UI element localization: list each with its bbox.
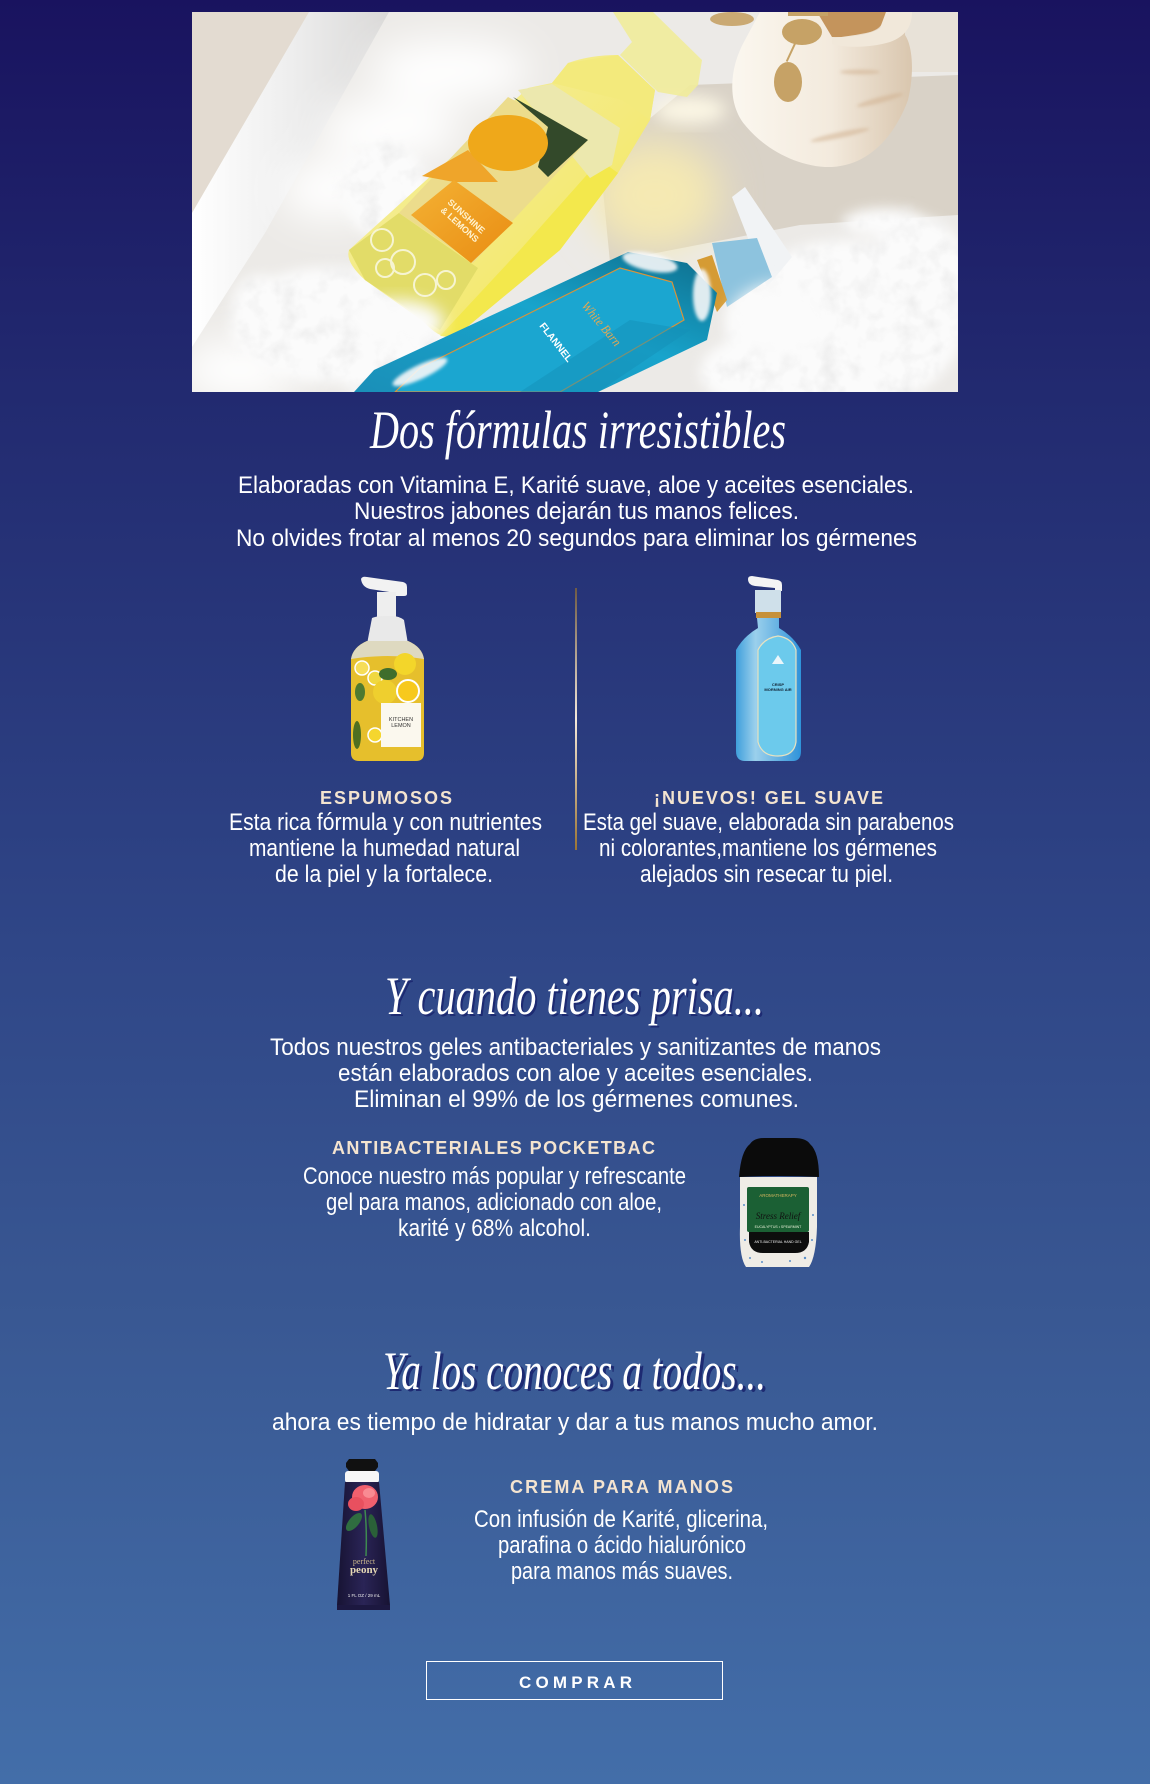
hydrate sentence: ahora es tiempo de hidratar y dar a tus manos mucho amor. (272, 1409, 878, 1436)
product: antibacteriales pocketbac: karité y 68% alcohol. (398, 1215, 591, 1242)
blue gel bottle: White Barn (579, 299, 624, 349)
product: espumosos: Esta rica fórmula y con nutrientes (229, 809, 542, 836)
vase (710, 12, 912, 167)
icon: foaming soap bottle (lemon) (351, 577, 424, 761)
intro text block: Nuestros jabones dejarán tus manos felices. (354, 498, 799, 525)
icon: foaming soap bottle (lemon): LEMON (391, 723, 411, 729)
icon: pocketbac sanitizer (739, 1138, 819, 1267)
icon: pocketbac sanitizer: EUCALYPTUS • SPEARMINT (755, 1225, 802, 1229)
yellow foaming bottle: SUNSHINE (446, 197, 487, 236)
yellow foaming bottle: & LEMONS (439, 205, 481, 244)
product: gel suave: ni colorantes,mantiene los gérmenes (599, 835, 937, 862)
intro text block: No olvides frotar al menos 20 segundos para eliminar los gérmenes (236, 525, 917, 552)
icon: hand cream tube: peony (350, 1564, 379, 1576)
icon: hand cream tube: perfect (353, 1557, 376, 1566)
intro text block: Elaboradas con Vitamina E, Karité suave, aloe y aceites esenciales. (238, 472, 914, 499)
icon: gel soap bottle (blue): MORNING AIR (764, 687, 792, 692)
yellow foaming bottle (348, 12, 702, 337)
icon: gel soap bottle (blue) (736, 576, 801, 761)
product: antibacteriales pocketbac (303, 1138, 686, 1242)
icon: foaming soap bottle (lemon): KITCHEN (389, 717, 413, 723)
heading: Ya los conoces a todos: Ya los conoces a todos... (383, 1341, 766, 1401)
product: crema para manos: parafina o ácido hialurónico (498, 1532, 746, 1559)
product: antibacteriales pocketbac: Conoce nuestro más popular y refrescante (303, 1163, 686, 1190)
product: crema para manos: Con infusión de Karité, glicerina, (474, 1506, 768, 1533)
product: antibacteriales pocketbac: gel para manos, adicionado con aloe, (326, 1189, 662, 1216)
product: gel suave (583, 788, 954, 888)
icon: pocketbac sanitizer: AROMATHERAPY (759, 1193, 797, 1198)
product: antibacteriales pocketbac: ANTIBACTERIALES POCKETBAC (332, 1138, 655, 1158)
product: crema para manos: CREMA PARA MANOS (510, 1477, 733, 1497)
divider line (575, 588, 577, 850)
heading: Y cuando tienes prisa: Y cuando tienes prisa... (387, 968, 766, 1028)
foam (230, 142, 968, 410)
button: comprar: COMPRAR (519, 1673, 632, 1692)
antibacterial text block: Eliminan el 99% de los gérmenes comunes. (354, 1086, 799, 1113)
warm shadow area (600, 75, 958, 262)
icon: pocketbac sanitizer: Stress Relief (756, 1211, 802, 1221)
product: gel suave: Esta gel suave, elaborada sin parabenos (583, 809, 954, 836)
antibacterial text block: Todos nuestros geles antibacteriales y sanitizantes de manos (270, 1034, 881, 1061)
icon: hand cream tube (337, 1459, 390, 1610)
hero photo: hand soaps in foam (180, 12, 968, 410)
intro text block (236, 472, 917, 552)
antibacterial text block (270, 1034, 881, 1113)
icon: hand cream tube: 1 FL OZ / 29 mL (348, 1593, 381, 1598)
icon: gel soap bottle (blue): CRISP (772, 682, 784, 687)
heading: Ya los conoces a todos: Ya los conoces a todos... (386, 1343, 769, 1403)
product: gel suave: alejados sin resecar tu piel. (640, 861, 893, 888)
blue gel bottle: FLANNEL (537, 321, 574, 365)
product: gel suave: ¡NUEVOS! GEL SUAVE (654, 788, 883, 808)
product: crema para manos (474, 1477, 768, 1585)
icon: pocketbac sanitizer: ANTI-BACTERIAL HAND GEL (754, 1240, 802, 1244)
product: espumosos (229, 788, 542, 888)
product: crema para manos: para manos más suaves. (511, 1558, 733, 1585)
button: comprar (426, 1662, 722, 1700)
foam over bottle base (380, 288, 454, 336)
product: espumosos: mantiene la humedad natural (249, 835, 520, 862)
heading: Dos fórmulas irresistibles: Dos fórmulas irresistibles (369, 400, 786, 460)
antibacterial text block: están elaborados con aloe y aceites esenciales. (338, 1060, 813, 1087)
blue gel bottle (354, 187, 792, 392)
product: espumosos: de la piel y la fortalece. (275, 861, 493, 888)
heading: Y cuando tienes prisa: Y cuando tienes prisa... (385, 966, 764, 1026)
product: espumosos: ESPUMOSOS (320, 788, 452, 808)
